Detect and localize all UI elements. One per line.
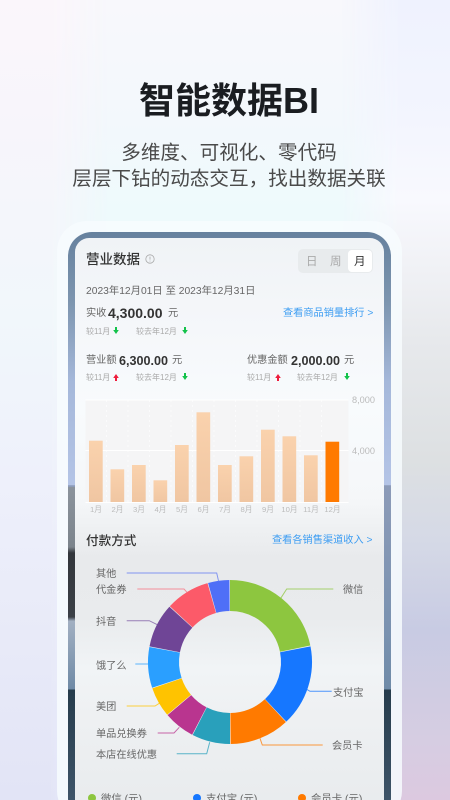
icon: info — [145, 254, 154, 264]
metric: 实收: 较11月 — [86, 327, 110, 336]
donut labels: 本店在线优惠 — [96, 750, 157, 761]
subtitle: 多维度、可视化、零代码 — [121, 142, 337, 164]
segmented control — [298, 249, 373, 273]
donut labels: 美团 — [96, 702, 116, 713]
x axis labels: 5月 — [176, 505, 188, 514]
y axis labels: 8,000 — [352, 395, 375, 405]
phone frame wallpaper — [68, 232, 391, 800]
metric: 营业额: 较11月 — [86, 373, 110, 382]
metric: 营业额: 6,300.00 — [119, 354, 168, 368]
x axis labels: 6月 — [198, 505, 209, 514]
wallpaper rock — [68, 487, 75, 621]
background wash: right side — [390, 0, 450, 800]
x axis labels: 1月 — [90, 505, 102, 514]
wallpaper left haze — [68, 621, 75, 689]
x axis labels: 9月 — [262, 505, 274, 514]
x axis labels: 4月 — [155, 505, 166, 514]
donut labels: 代金券 — [96, 585, 127, 596]
metric: 实收 — [86, 305, 178, 336]
x axis labels: 10月 — [281, 505, 298, 514]
tab labels — [306, 256, 366, 268]
metric: 实收: 元 — [168, 308, 178, 319]
metric: 营业额 — [86, 354, 182, 382]
donut labels: 支付宝 — [333, 688, 364, 699]
x axis labels — [90, 505, 341, 514]
donut labels: 微信 — [343, 585, 363, 596]
metric: 营业额: 营业额 — [86, 355, 117, 366]
donut labels: 会员卡 — [332, 741, 363, 752]
legend — [88, 793, 362, 800]
tab labels: 月 — [354, 256, 366, 268]
subtitle: 层层下钻的动态交互，找出数据关联 — [72, 168, 386, 190]
metric: 营业额: 元 — [172, 355, 182, 366]
x axis labels: 7月 — [219, 505, 231, 514]
metric: 营业额: 较去年12月 — [136, 373, 177, 382]
donut labels: 单品兑换券 — [96, 729, 147, 740]
x axis labels: 2月 — [112, 505, 123, 514]
x axis labels: 3月 — [133, 505, 145, 514]
heading: 营业数据: 营业数据 — [86, 252, 140, 267]
metric: 实收: 较去年12月 — [136, 327, 177, 336]
tab labels: 日 — [306, 256, 318, 268]
y axis labels: 4,000 — [352, 446, 375, 456]
phone screen — [75, 238, 384, 800]
active tab — [348, 250, 372, 272]
legend dot: 会员卡 — [298, 794, 306, 800]
donut labels: 饿了么 — [96, 661, 127, 672]
metric: 优惠金额: 较11月 — [247, 373, 271, 382]
phone bezel — [57, 221, 402, 800]
y axis labels — [352, 395, 375, 456]
donut labels: 其他 — [96, 569, 116, 580]
legend dot: 支付宝 — [193, 794, 201, 800]
link: 商品销量排行: 查看商品销量排行 > — [283, 308, 373, 319]
heading: 付款方式: 付款方式 — [86, 534, 136, 548]
x axis labels: 8月 — [241, 505, 252, 514]
metric: 优惠金额: 较去年12月 — [297, 373, 338, 382]
tab labels: 周 — [330, 256, 342, 268]
date range: 2023年12月01日 至 2023年12月31日 — [86, 286, 255, 297]
background wash: left side — [0, 650, 58, 800]
metric: 优惠金额 — [247, 354, 354, 382]
legend dot: 微信 — [88, 794, 96, 800]
metric: 实收: 4,300.00 — [108, 305, 162, 321]
link: 销售渠道收入: 查看各销售渠道收入 > — [272, 535, 372, 546]
metric: 实收: 实收 — [86, 308, 106, 319]
donut labels — [96, 568, 364, 761]
donut labels: 抖音 — [96, 617, 116, 628]
subtitle — [72, 142, 386, 190]
metric: 优惠金额: 优惠金额 — [247, 355, 288, 366]
metric: 优惠金额: 2,000.00 — [291, 354, 340, 368]
title: 智能数据BI — [139, 80, 319, 121]
leader lines — [127, 573, 333, 754]
x axis labels: 12月 — [324, 505, 341, 514]
metric: 优惠金额: 元 — [344, 355, 354, 366]
x axis labels: 11月 — [303, 505, 319, 514]
